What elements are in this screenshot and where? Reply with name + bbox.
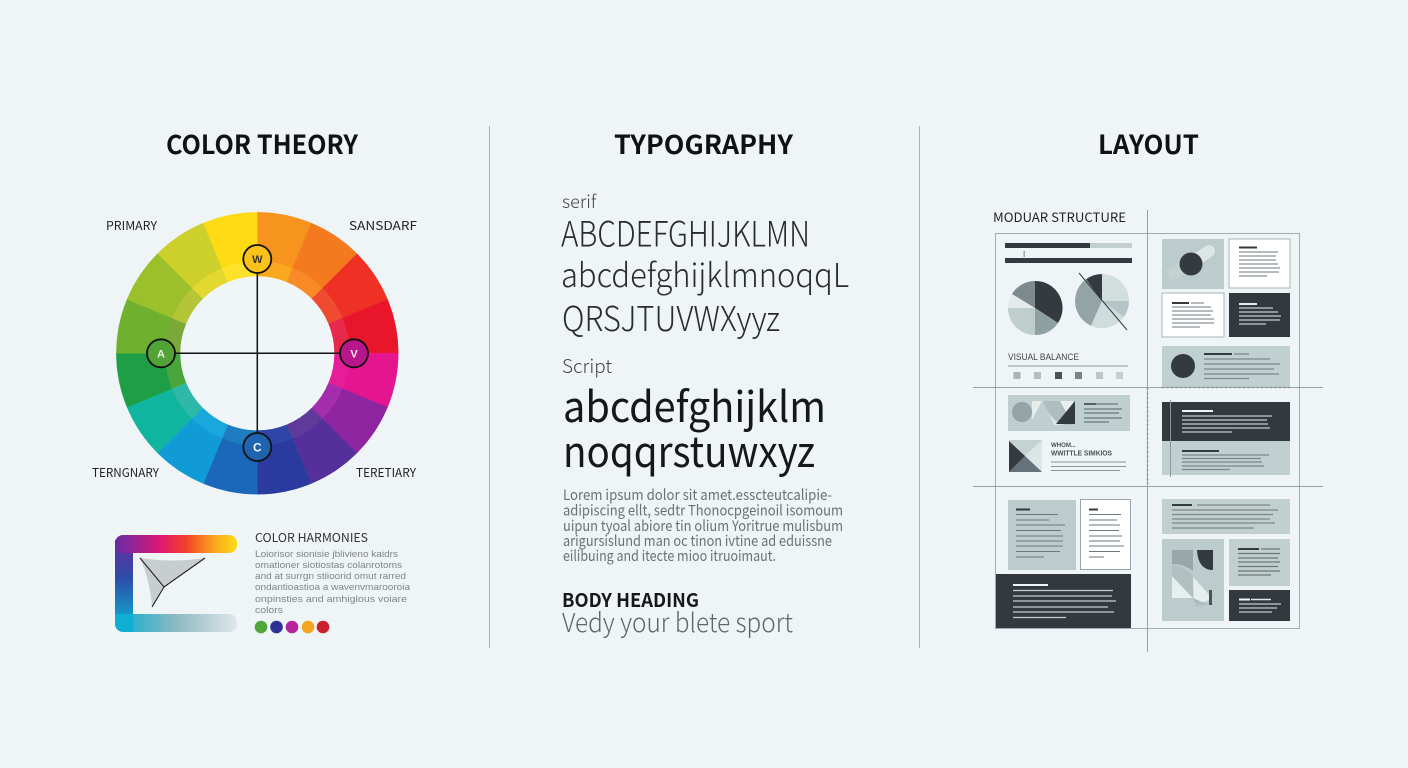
heading: layout: LAYOUT [1098,125,1199,162]
panel: color theory [92,125,417,633]
module: dark footer block [996,574,1131,628]
label: script: Script [562,352,612,379]
wheel marker: left [147,339,175,367]
visual balance label and scale: VISUAL BALANCE [1008,352,1079,363]
wheel marker: right: V [350,348,358,360]
column dividers [490,126,920,648]
label: serif: serif [562,188,597,214]
text block: color harmonies: ondantioastioa a wavenvmarooroia [255,582,411,593]
wheel marker: right [340,339,368,367]
module: abstract shapes tile [1162,539,1224,621]
white space label: WWITTLE SIMKIOS [1051,450,1112,458]
wheel crosshair [161,259,354,447]
alphabet sample: script: noqqrstuwxyz [563,419,815,480]
panel: layout [973,125,1323,652]
module: white text card [1229,239,1290,288]
alphabet sample: serif [561,206,849,341]
visual balance label and scale [1008,352,1128,379]
module: white text card two [1162,293,1224,337]
label: sansdarf: SANSDARF [349,217,417,234]
color wheel [106,202,408,504]
alphabet sample: serif: abcdefghijklmnoqqL [561,249,849,297]
text block: color harmonies: omationer siotiostas colanrotoms [255,560,402,571]
module: small dark tile [1229,590,1290,621]
white space label: WHOM... [1051,442,1076,449]
module: shapes banner [1008,395,1130,431]
wheel marker: bottom: C [253,440,262,454]
body text sample: arigursislund man oc tinon ivtine ad eduissne [563,530,832,551]
wheel marker: left: A [157,348,165,360]
harmony colour dots [255,621,329,633]
alphabet sample: serif: ABCDEFGHIJKLMN [561,206,810,258]
pie chart: right [1075,273,1129,330]
module: dark and light stacked block [1162,400,1290,477]
module: light text column [1008,500,1076,570]
layout grid frame [973,210,1323,652]
wheel marker: top: W [252,254,263,266]
heading: color theory: COLOR THEORY [166,125,359,162]
wheel inner ring [159,255,356,452]
alphabet sample: serif: QRSJTUVWXyyz [562,292,780,341]
alphabet sample: script: abcdefghijklm [563,374,826,435]
label: terngnary: TERNGNARY [92,464,160,481]
label: modular structure: MODUAR STRUCTURE [993,207,1126,226]
module: triangles icon [1009,440,1042,472]
text block: color harmonies: onpinsties and amhiglous voiare [255,594,407,605]
body text sample: eilibuing and itecte mioo itruoimaut. [563,545,776,566]
heading: typography: TYPOGRAPHY [614,125,794,162]
body text sample: adipiscing ellt, sedtr Thonocpgeinoil isomoum [563,500,843,520]
module: text banner [1162,499,1290,534]
module: dark text card [1229,293,1290,337]
white space label [1051,442,1112,458]
body sample line: Vedy your blete sport [562,603,793,640]
pie chart: left [1008,281,1063,335]
module: top bars [1005,243,1132,263]
body heading: BODY HEADING [562,586,699,613]
heading: color harmonies: COLOR HARMONIES [255,529,368,546]
wheel marker: top [243,245,271,273]
text block: color harmonies: and at surrgn stiioorid omut rarred [255,571,406,582]
text block: color harmonies: Loiorisor sionisie jblivieno kaidrs [255,549,398,560]
body text sample [563,484,843,566]
icon: color harmonies gradient frame [115,535,237,632]
body text sample: uipun tyoal abiore tin olium Yoritrue mulisbum [563,515,843,536]
text block: color harmonies: colors [255,605,283,616]
text block: color harmonies [255,549,411,616]
white space lines [1051,462,1126,470]
label: primary: PRIMARY [106,217,158,234]
module: white text column [1080,500,1130,570]
wheel centre [180,276,334,430]
panel: typography [561,125,849,640]
module: circle tile [1162,239,1224,289]
module: circle banner [1162,346,1290,387]
dotted guides [1148,388,1290,484]
module: text tile [1229,539,1290,586]
wheel marker: bottom [243,433,271,461]
body text sample: Lorem ipsum dolor sit amet.esscteutcalipie- [563,484,832,505]
label: teretiary: TERETIARY [356,464,417,481]
alphabet sample: script [563,374,826,480]
wheel outer segments [106,202,408,504]
